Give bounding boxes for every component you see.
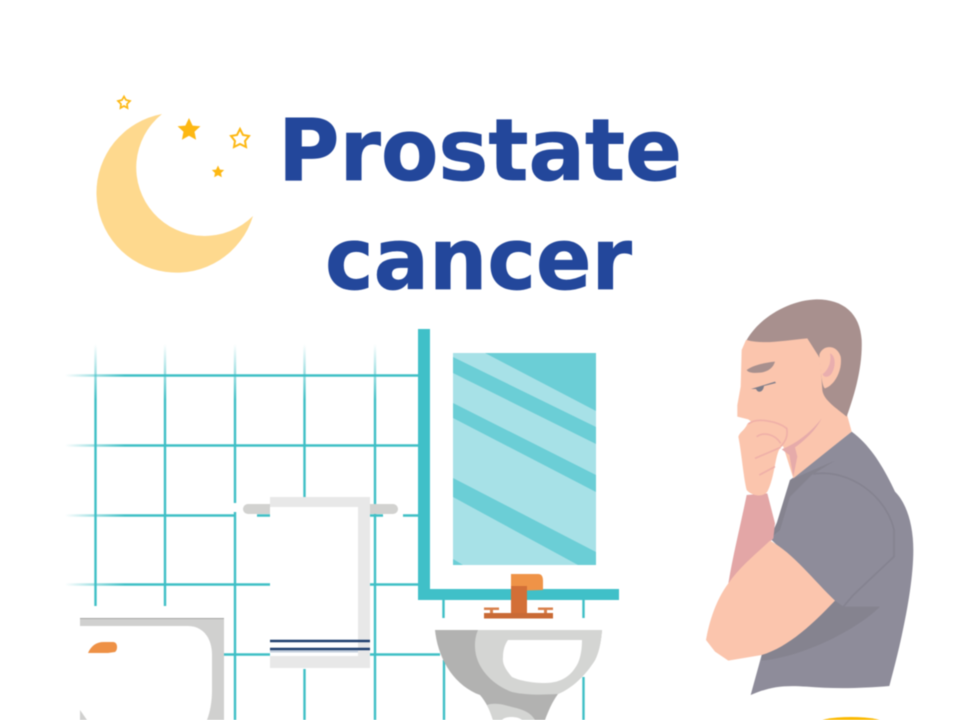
title: Prostate bbox=[278, 101, 682, 201]
crescent moon bbox=[96, 114, 253, 273]
hair bbox=[747, 299, 862, 417]
sink bbox=[435, 630, 602, 720]
yellow shape at bottom edge bbox=[816, 717, 886, 720]
shirt folds bbox=[762, 461, 880, 661]
mirror frame bbox=[418, 329, 619, 600]
flush handle bbox=[88, 642, 117, 653]
outlined star left bbox=[118, 96, 130, 108]
mirror glass bbox=[453, 353, 596, 565]
mirror reflections bbox=[453, 353, 596, 565]
shirt bbox=[751, 432, 913, 695]
forearm bbox=[728, 493, 775, 583]
title: cancer bbox=[325, 210, 633, 310]
towel on rail bbox=[243, 497, 398, 668]
hand bbox=[738, 420, 787, 495]
pedestal highlight bbox=[487, 704, 535, 720]
large filled star bbox=[178, 118, 200, 140]
head and neck bbox=[737, 337, 852, 478]
sink body bbox=[435, 630, 602, 720]
outlined star right bbox=[231, 129, 249, 147]
toilet tank bbox=[80, 618, 224, 720]
arm bbox=[706, 541, 835, 661]
small filled star bbox=[212, 166, 224, 177]
towel stripes bbox=[270, 641, 370, 649]
eyebrow bbox=[747, 362, 775, 373]
worried man bbox=[706, 299, 913, 695]
icon: crescent moon with stars bbox=[96, 96, 253, 273]
faucet bbox=[484, 574, 553, 618]
title bbox=[278, 101, 682, 310]
ear bbox=[819, 347, 841, 388]
eye bbox=[751, 382, 776, 392]
mirror with frame bbox=[418, 329, 619, 600]
basin bbox=[503, 640, 582, 683]
towel rail bbox=[243, 504, 398, 514]
neck shadow bbox=[782, 418, 822, 477]
sink highlight bbox=[475, 630, 602, 695]
towel bbox=[270, 497, 370, 668]
finger lines bbox=[748, 420, 787, 475]
bathroom tile wall grid bbox=[65, 344, 584, 720]
